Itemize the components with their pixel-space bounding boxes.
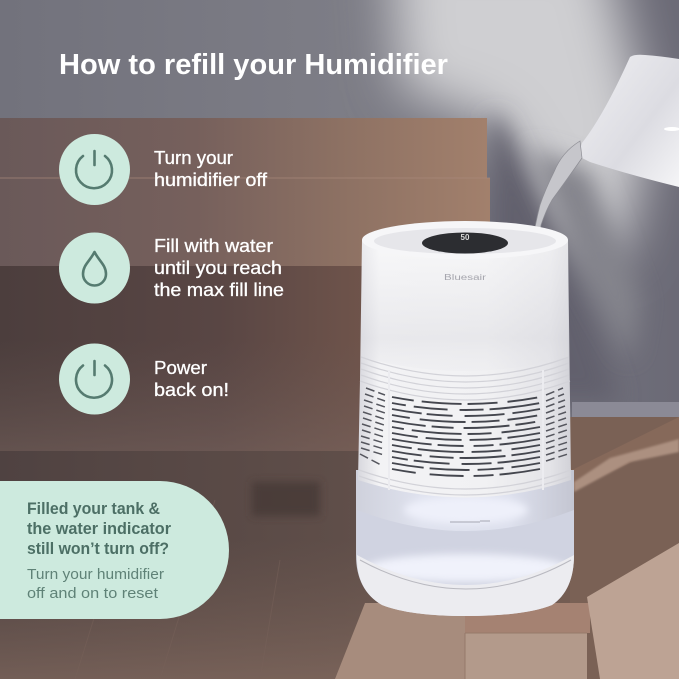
callout heading [27,502,171,554]
grill side slots [360,388,568,466]
grill ribs [359,357,571,495]
step 1 text [154,150,268,186]
callout heading: still won’t turn off? [27,540,169,558]
step 1 text: humidifier off [154,170,268,190]
pitcher [580,55,679,187]
step 2 icon: water drop [59,232,130,304]
step 2 text [154,236,284,300]
step 2 text: the max fill line [154,280,284,300]
logo: Bluesair [444,273,486,282]
callout heading: Filled your tank & [27,500,160,518]
step 3 text: back on! [154,380,229,400]
step 2 text: Fill with water [154,236,273,256]
top rim [362,221,568,252]
tank [356,470,574,616]
wooden shelf lower step [0,266,365,451]
humidifier [356,221,574,616]
base [357,555,574,616]
callout [0,481,229,619]
callout body [27,568,164,598]
display [422,232,508,254]
humidifier: 50 [461,233,470,242]
callout body: off and on to reset [27,585,159,602]
step 3 text [155,360,228,396]
step 1 text: Turn your [154,148,233,168]
water stream [535,140,582,228]
step 2 text: until you reach [154,258,282,278]
title: How to refill your Humidifier [59,49,448,81]
wooden shelf upper step [0,118,490,266]
step 3 icon: power [59,344,130,414]
callout body: Turn your humidifier [27,566,164,583]
grill centre slots [392,397,540,476]
floor [0,417,679,679]
step 1 icon: power [59,134,130,205]
callout heading: the water indicator [27,520,172,538]
step 3 text: Power [154,358,207,378]
body [358,240,571,498]
